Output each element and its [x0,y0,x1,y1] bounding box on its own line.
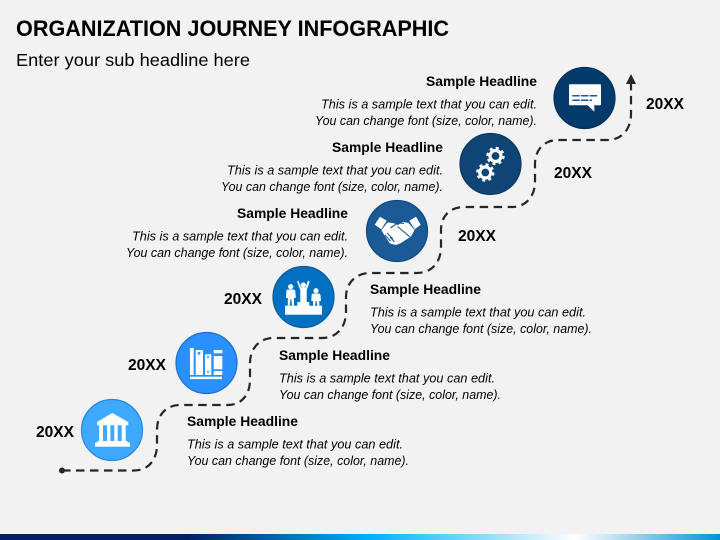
step 1 marker [82,400,142,460]
step 5 text block: Sample Headline [332,139,443,155]
step 6 text block: You can change font (size, color, name). [315,114,537,128]
step 1 text block: You can change font (size, color, name). [187,454,409,468]
step 1 year: 20XX [36,424,75,441]
icon: books [190,348,222,379]
step 4 text block: You can change font (size, color, name). [126,246,348,260]
step 5 text block: You can change font (size, color, name). [221,180,443,194]
step 6 marker [554,68,615,128]
icon: gears [477,148,504,180]
step 3 text block: You can change font (size, color, name). [370,322,592,336]
step 3 text block [370,281,592,336]
step 1 text block [187,413,409,468]
step 4 text block: This is a sample text that you can edit. [132,230,348,244]
step 4 year: 20XX [458,228,497,245]
step 3 text block: Sample Headline [370,281,481,297]
step 6 text block: Sample Headline [426,73,537,89]
step 1 text block: This is a sample text that you can edit. [187,438,403,452]
step 3 marker [273,266,334,328]
step 2 text block: Sample Headline [279,347,390,363]
footer gradient bar [0,534,720,540]
step 4 text block: Sample Headline [237,205,348,221]
icon: bank building [95,413,130,447]
step 5 marker [460,134,521,194]
step 1 text block: Sample Headline [187,413,298,429]
step 5 text block: This is a sample text that you can edit. [227,164,443,178]
step 6 year: 20XX [646,96,685,113]
step 4 text block [126,205,348,260]
step 5 text block [221,139,443,194]
step 3 text block: This is a sample text that you can edit. [370,306,586,320]
step 6 text block [315,73,537,128]
subtitle: Enter your sub headline here [16,50,250,70]
icon: handshake [375,217,421,245]
icon: podium with people [285,280,322,315]
step 2 text block: You can change font (size, color, name). [279,388,501,402]
step 4 marker [366,200,428,262]
journey dashed path with arrow [59,74,636,474]
step 2 text block [279,347,501,402]
step 6 text block: This is a sample text that you can edit. [321,98,537,112]
step 2 marker [176,332,237,394]
step 2 text block: This is a sample text that you can edit. [279,372,495,386]
step 5 year: 20XX [554,165,593,182]
title: ORGANIZATION JOURNEY INFOGRAPHIC [16,16,449,41]
icon: speech bubble [569,84,601,112]
step 2 year: 20XX [128,357,167,374]
step 3 year: 20XX [224,291,263,308]
